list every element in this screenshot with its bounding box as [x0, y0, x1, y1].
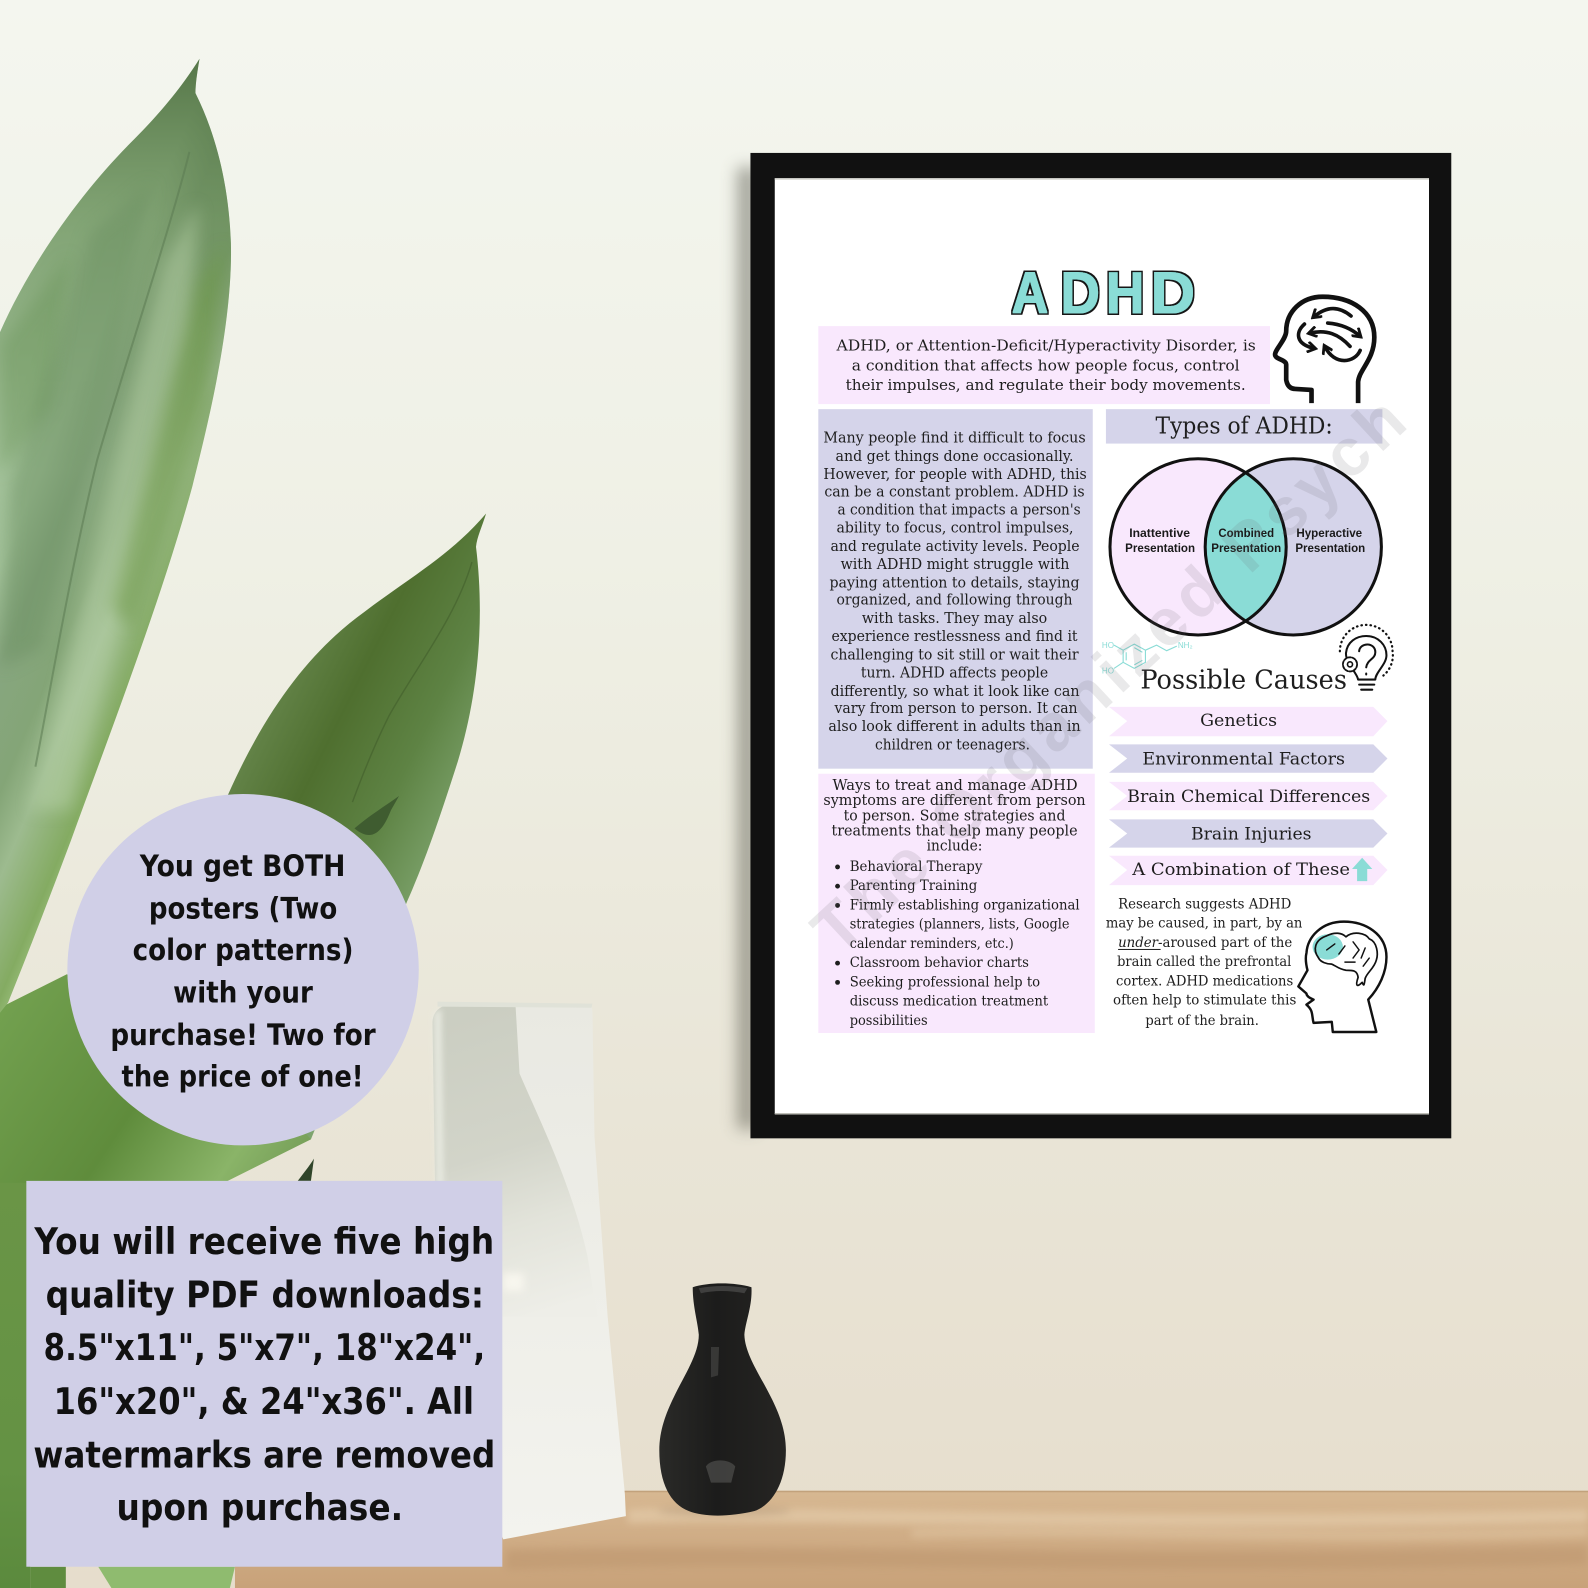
- panel: treatment strategies: treatments that help many people: [831, 823, 1078, 840]
- wooden shelf: [235, 1491, 1588, 1588]
- intro text block: ADHD, or Attention-Deficit/Hyperactivity Disorder, is: [836, 336, 1256, 354]
- callout box: five PDF downloads: 16"x20", & 24"x36". All: [54, 1380, 474, 1423]
- banner: a combination of these: A Combination of These: [1131, 860, 1350, 880]
- panel: description of ADHD: challenging to sit still or wait their: [830, 646, 1080, 663]
- callout circle: both posters: You get BOTH: [139, 849, 345, 883]
- banner: genetics: [1109, 707, 1387, 736]
- icon: head with swirling arrows: [1275, 297, 1374, 403]
- intro text block: their impulses, and regulate their body movements.: [846, 376, 1246, 394]
- banner: brain chemical differences: [1109, 782, 1387, 810]
- research text block: Research suggests ADHD: [1118, 896, 1291, 912]
- research text block: brain called the prefrontal: [1117, 954, 1291, 970]
- panel: treatment strategies: to person. Some strategies and: [844, 807, 1065, 824]
- panel: description of ADHD: experience restlessness and find it: [831, 628, 1078, 645]
- leaf: tall: [0, 58, 231, 1012]
- research text block: under-aroused part of the: [1118, 935, 1292, 951]
- venn label: inattentive: [1125, 527, 1195, 555]
- panel: description of ADHD: However, for people with ADHD, this: [823, 466, 1087, 483]
- venn label: hyperactive: [1295, 527, 1365, 555]
- panel: description of ADHD: turn. ADHD affects people: [861, 665, 1048, 682]
- callout box: five PDF downloads: You will receive five high: [34, 1220, 494, 1263]
- callout circle: both posters: with your: [173, 976, 313, 1010]
- poster title: [1012, 261, 1195, 326]
- venn label: combined: Combined: [1218, 527, 1274, 540]
- venn diagram: three presentations: [1110, 459, 1381, 635]
- treatment bullet list: discuss medication treatment: [850, 994, 1049, 1010]
- treatment bullet list: Classroom behavior charts: [850, 955, 1029, 971]
- panel: treatment strategies: [818, 774, 1095, 1033]
- intro text block: a condition that affects how people focus, control: [852, 357, 1240, 375]
- venn label: hyperactive: Hyperactive: [1296, 527, 1363, 540]
- banner: brain injuries: [1109, 819, 1387, 848]
- leaf: middle: [152, 513, 486, 1165]
- leaf: lower left: [0, 974, 311, 1588]
- callout box: five PDF downloads: quality PDF downloads:: [46, 1273, 484, 1316]
- callout circle: both posters: color patterns): [133, 933, 353, 967]
- banner: genetics: Genetics: [1200, 711, 1277, 731]
- callout circle: both posters: purchase! Two for: [110, 1018, 376, 1052]
- panel: description of ADHD: [818, 409, 1093, 769]
- research text block: part of the brain.: [1145, 1013, 1259, 1029]
- panel: description of ADHD: organized, and following through: [837, 592, 1073, 609]
- heading: types of ADHD: Types of ADHD:: [1156, 412, 1333, 439]
- research text block: may be caused, in part, by an: [1106, 916, 1303, 932]
- treatment bullet list: Parenting Training: [850, 878, 978, 894]
- panel: description of ADHD: with tasks. They may also: [862, 610, 1047, 627]
- panel: description of ADHD: children or teenagers.: [875, 736, 1030, 753]
- research text block: cortex. ADHD medications: [1116, 973, 1293, 989]
- venn label: inattentive: Inattentive: [1129, 527, 1191, 540]
- panel: description of ADHD: and regulate activity levels. People: [830, 538, 1080, 555]
- treatment bullet list: strategies (planners, lists, Google: [850, 917, 1069, 933]
- venn label: combined: [1211, 527, 1281, 555]
- panel: description of ADHD: differently, so what it look like can: [830, 683, 1080, 700]
- heading: types of ADHD: [1106, 409, 1382, 444]
- treatment bullet list: [835, 859, 1080, 1029]
- venn label: inattentive: Presentation: [1125, 542, 1195, 555]
- icon: dopamine molecule: NH₂: [1178, 641, 1193, 650]
- callout box: five PDF downloads: upon purchase.: [116, 1486, 403, 1529]
- leaf tip under box: [298, 1159, 314, 1181]
- watermark: The Organized Psych: [798, 382, 1420, 968]
- panel: description of ADHD: Many people find it difficult to focus: [823, 430, 1086, 447]
- panel: description of ADHD: can be a constant problem. ADHD is: [824, 483, 1085, 500]
- treatment bullet list: Firmly establishing organizational: [850, 897, 1080, 913]
- panel: treatment strategies: symptoms are different from person: [823, 792, 1086, 809]
- poster title: D: [1060, 261, 1100, 326]
- callout box: five PDF downloads: [26, 1181, 502, 1567]
- panel: treatment strategies: Ways to treat and manage ADHD: [832, 777, 1078, 794]
- picture frame: [737, 153, 1451, 1138]
- banner: environmental factors: Environmental Factors: [1142, 750, 1345, 770]
- black vase: [657, 1283, 791, 1516]
- banner: a combination of these: [1109, 856, 1387, 885]
- venn label: hyperactive: Presentation: [1295, 542, 1365, 555]
- treatment bullet list: Seeking professional help to: [850, 974, 1040, 990]
- treatment bullet list: Behavioral Therapy: [850, 859, 983, 875]
- panel: treatment strategies: include:: [927, 838, 982, 855]
- banner: environmental factors: [1109, 744, 1387, 773]
- icon: dopamine molecule: HO: [1102, 641, 1114, 650]
- venn label: combined: Presentation: [1211, 542, 1281, 555]
- poster title: A: [1012, 261, 1048, 326]
- icon: dopamine molecule: HO: [1102, 666, 1114, 675]
- callout circle: both posters: posters (Two: [149, 892, 337, 926]
- banner: brain injuries: Brain Injuries: [1191, 825, 1312, 845]
- panel: description of ADHD: paying attention to details, staying: [829, 574, 1080, 591]
- poster title: H: [1106, 261, 1144, 326]
- panel: description of ADHD: a condition that impacts a person's: [838, 501, 1081, 518]
- panel: description of ADHD: and get things done occasionally.: [836, 448, 1074, 465]
- callout box: five PDF downloads: 8.5"x11", 5"x7", 18"x24",: [44, 1326, 485, 1369]
- banner: brain chemical differences: Brain Chemical Differences: [1127, 787, 1370, 807]
- panel: description of ADHD: vary from person to person. It can: [834, 700, 1078, 717]
- research text block: often help to stimulate this: [1113, 993, 1296, 1009]
- callout circle: both posters: [67, 794, 419, 1145]
- icon: head with brain and highlighted prefrontal cortex: [1298, 922, 1386, 1032]
- panel: description of ADHD: also look different in adults than in: [828, 718, 1081, 735]
- panel: description of ADHD: ability to focus, control impulses,: [837, 520, 1074, 537]
- icon: dopamine molecule: [1102, 641, 1193, 675]
- white twisted vase: [432, 1002, 626, 1539]
- plant leaves: [0, 41, 486, 1588]
- callout box: five PDF downloads: watermarks are removed: [33, 1433, 495, 1476]
- poster title: D: [1150, 261, 1195, 326]
- intro text block: [818, 326, 1270, 404]
- callout circle: both posters: the price of one!: [122, 1060, 364, 1094]
- treatment bullet list: possibilities: [850, 1013, 928, 1029]
- icon: teal up arrow: [1352, 858, 1372, 881]
- cause banners: [1109, 707, 1387, 885]
- panel: description of ADHD: with ADHD might struggle with: [841, 556, 1070, 573]
- heading: possible causes: Possible Causes: [1140, 666, 1347, 696]
- research text block: [1106, 896, 1303, 1029]
- treatment bullet list: calendar reminders, etc.): [850, 936, 1014, 952]
- icon: lightbulb with question mark and gear: [1340, 625, 1393, 690]
